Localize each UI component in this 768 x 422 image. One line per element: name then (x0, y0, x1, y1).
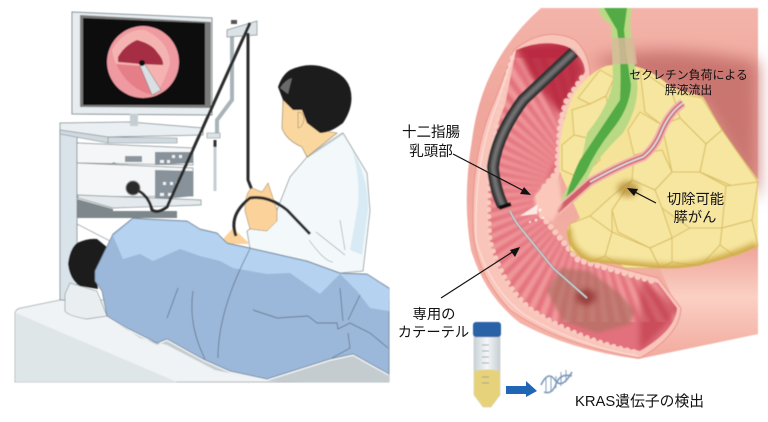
doctor hands and cable (245, 183, 277, 231)
mucosal folds (480, 80, 700, 300)
papilla (534, 172, 562, 222)
text: 専用のカテーテル: カテーテル (398, 325, 469, 341)
scope stand pole (207, 20, 257, 191)
doctor (223, 65, 370, 273)
endoscope cable (126, 23, 252, 211)
pancreatic duct (557, 103, 683, 211)
lumen depth shading (515, 40, 585, 115)
text: 専用のカテーテル: 専用の (413, 306, 455, 323)
icon: DNA helix (541, 370, 572, 393)
pancreas (559, 64, 758, 269)
patient (65, 218, 389, 379)
text: セクレチン負荷による膵液流出: 膵液流出 (665, 83, 712, 97)
text: 切除可能膵がん (667, 191, 724, 226)
dark shading behind pancreas (590, 51, 758, 200)
duodenum lumen (487, 42, 678, 352)
lower duodenal tube (638, 235, 758, 359)
outer wave line (476, 52, 638, 356)
text: 十二指腸乳頭部: 乳頭部 (409, 143, 453, 160)
panel: endoscopy procedure illustration (15, 12, 389, 382)
pancreatic juice spray (520, 204, 544, 223)
arrow: blue (506, 381, 537, 397)
tumour shadow (617, 181, 639, 197)
bile duct (557, 8, 637, 212)
doctor hair (278, 65, 351, 133)
duodenum rim and wall (473, 34, 681, 358)
monitor (72, 12, 212, 126)
text: 切除可能膵がん: 膵がん (674, 209, 716, 226)
doctor ear (298, 112, 304, 128)
ulcerated tumour area (547, 268, 635, 333)
scalloped mucosa edges (489, 58, 656, 352)
text: セクレチン負荷による膵液流出: セクレチン負荷による (629, 68, 748, 82)
text: 専用のカテーテル (398, 306, 469, 341)
doctor neck and face (282, 100, 337, 157)
sample tube (473, 322, 501, 407)
text: 切除可能膵がん: 切除可能 (667, 191, 724, 208)
arrow: to tumour (627, 188, 656, 203)
endoscopic view on screen (107, 26, 179, 98)
catheter (510, 211, 587, 298)
arrow: to papilla (453, 154, 531, 195)
doctor coat (247, 133, 370, 273)
patient head (68, 239, 108, 289)
endoscope in duodenum (493, 52, 574, 208)
retroperitoneal background and outer duodenum (467, 8, 758, 359)
pillow (65, 283, 107, 319)
pancreas edge shading (567, 228, 758, 269)
text: セクレチン負荷による膵液流出 (629, 68, 748, 97)
equipment cart (60, 122, 203, 300)
panel: duodenum and pancreas anatomy (467, 8, 758, 360)
bed (15, 300, 389, 382)
text: KRAS遺伝子の検出: KRAS遺伝子の検出 (575, 393, 704, 410)
blanket (95, 218, 389, 379)
text: 十二指腸乳頭部: 十二指腸 (402, 124, 460, 141)
arrow: to catheter (441, 247, 520, 298)
text: 十二指腸乳頭部 (402, 124, 460, 160)
